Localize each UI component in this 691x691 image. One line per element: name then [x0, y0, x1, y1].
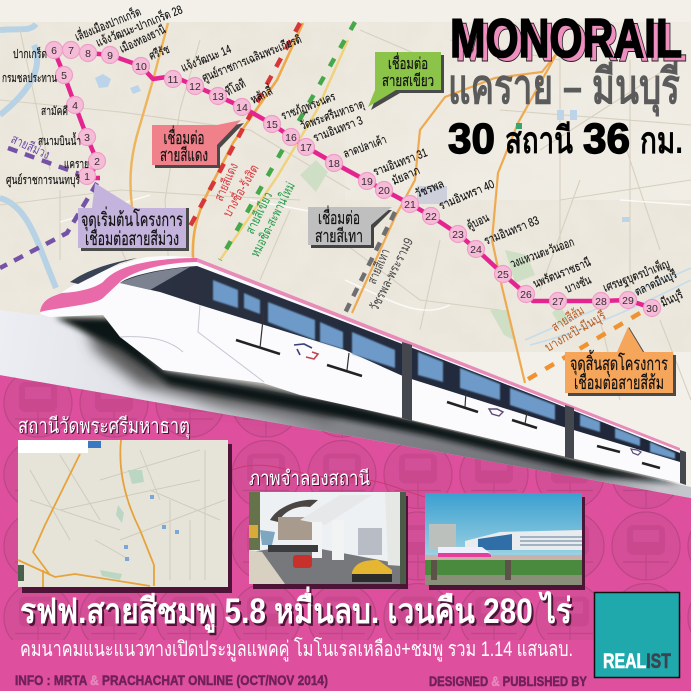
callout: red line [152, 120, 244, 168]
callout: gray line: เชื่อมต่อ [318, 205, 360, 228]
station markers 1-30: 2 [94, 156, 100, 168]
station name labels: รามอินทรา 31 [371, 145, 430, 179]
station name labels [2, 1, 686, 311]
station name labels: มัยลาภ [390, 163, 422, 188]
station name labels: เศรษฐบุตรบำเพ็ญ [601, 256, 672, 296]
summary: stations and distance: สถานี [505, 120, 573, 161]
callout: purple line start: จุดเริ่มต้นโครงการ [81, 206, 183, 232]
station markers 1-30: 8 [85, 48, 91, 60]
pink route line [54, 50, 652, 308]
station name labels: บางชัน [563, 273, 593, 296]
photo: station building render [425, 493, 585, 590]
source credit: INFO : MRTA & PRACHACHAT ONLINE (OCT/NOV 2014) [15, 672, 328, 688]
monorail train [0, 256, 691, 498]
station markers 1-30: 24 [470, 244, 482, 256]
car joints [402, 342, 686, 485]
station name labels: ศูนย์ราชการนนทบุรี [6, 173, 80, 188]
station markers 1-30: 20 [378, 185, 390, 197]
panel: station map [18, 440, 232, 593]
station markers 1-30: 18 [328, 158, 340, 170]
door seam lines [120, 305, 264, 382]
station markers 1-30: 13 [212, 91, 224, 103]
station name labels: ทีโอที [223, 76, 248, 99]
station markers 1-30: 16 [285, 132, 297, 144]
summary: stations and distance: 30 [448, 115, 495, 163]
callout: gray line [308, 205, 392, 248]
dashed line: orange [525, 313, 640, 381]
station markers 1-30: 1 [84, 171, 90, 183]
door marks [236, 340, 660, 468]
window blue panes [213, 280, 675, 459]
windows [120, 266, 680, 462]
line name labels: สายสีแดง [211, 161, 241, 203]
line name labels: วัชรพล-พระราม9 [366, 235, 416, 313]
station markers 1-30: 19 [361, 176, 373, 188]
summary: stations and distance [448, 115, 683, 163]
callout: green line [368, 52, 444, 110]
station name labels: ศูนย์ราชการเฉลิมพระเกียรติ [200, 32, 304, 86]
station name labels: นพรัตนราชธานี [531, 255, 593, 291]
heading: station map: สถานีวัดพระศรีมหาธาตุ [18, 415, 190, 439]
station markers 1-30: 28 [595, 296, 607, 308]
summary: stations and distance: 36 [583, 115, 630, 163]
heading: station render: ภาพจำลองสถานี [250, 469, 371, 491]
station markers 1-30: 5 [61, 70, 67, 82]
station markers 1-30: 3 [84, 132, 90, 144]
station markers 1-30: 26 [520, 289, 532, 301]
station name labels: แคราย [64, 157, 89, 171]
station name labels: คู้บอน [464, 210, 492, 234]
station markers 1-30: 11 [168, 74, 179, 86]
pink nose [40, 258, 200, 312]
callout: purple line start [78, 183, 189, 251]
station name labels: ศรีรัช [147, 42, 172, 63]
station markers 1-30: 14 [236, 102, 248, 114]
station name labels: ปากเกร็ด [13, 46, 47, 61]
callout: red line: สายสีแดง [160, 145, 208, 165]
station name labels: มีนบุรี [658, 287, 686, 311]
station markers 1-30: 10 [135, 61, 147, 73]
station name labels: วงแหวนตะวันออก [508, 235, 576, 271]
dashed line: gray [345, 212, 395, 313]
station name labels: กรมชลประทาน [2, 71, 57, 85]
dashed line: red [188, 23, 300, 230]
station name labels: ราชภัฏพระนคร [279, 89, 338, 123]
line name labels: บางซื่อ-รังสิต [219, 161, 262, 220]
pink lower panel with icon pattern [0, 375, 691, 691]
line name labels: สายสีเทา [364, 246, 393, 286]
station markers 1-30: 12 [189, 81, 201, 93]
dashed line: green [220, 22, 355, 260]
callout: orange line end [565, 327, 676, 396]
line name labels: บางกะปิ-มีนบุรี [542, 308, 609, 355]
station markers 1-30: 15 [266, 119, 278, 131]
station name labels: เมืองทองธานี [117, 22, 168, 56]
publisher credit: DESIGNED & PUBLISHED BY [429, 673, 588, 689]
dashed line: purple [0, 148, 97, 268]
station name labels: รามอินทรา 83 [482, 213, 541, 248]
station name labels: วัดพระศรีมหาธาตุ [298, 97, 366, 134]
station markers 1-30: 29 [622, 295, 634, 307]
main headline [20, 586, 574, 636]
line name labels: หมอชิต-สะพานใหม่ [247, 179, 298, 259]
station markers 1-30: 21 [404, 199, 416, 211]
station markers 1-30: 4 [72, 100, 78, 112]
station name labels: ตลาดมีนบุรี [632, 267, 680, 300]
callout: gray line: สายสีเทา [315, 226, 363, 246]
station markers 1-30: 17 [300, 142, 312, 154]
station name labels: แจ้งวัฒนะ 14 [179, 42, 233, 75]
station name labels: วัชรพล [413, 177, 446, 201]
station name labels: หลักสี่ [247, 82, 275, 107]
pink roof stripe [197, 258, 680, 451]
logo: REALIST: REALIST [603, 650, 671, 673]
rail logo [294, 344, 318, 359]
main headline: รฟฟ.สายสีชมพู 5.8 หมื่นลบ. เวนคืน 280 ไร่ [22, 588, 574, 636]
station name labels: รามอินทรา 40 [437, 177, 497, 213]
callout: green line: สายสเขียว [382, 72, 434, 90]
line name labels: สายสีเขียว [242, 189, 275, 236]
line name labels: สายสีม่วง [9, 131, 52, 162]
station name labels: ลาดปลาเค้า [341, 132, 388, 161]
station markers 1-30 [46, 42, 660, 316]
heading: station map: สถานีวัดพระศรีมหาธาตุ [19, 416, 191, 440]
station markers 1-30: 25 [497, 269, 509, 281]
station markers 1-30: 7 [68, 45, 74, 57]
logo: REALIST [594, 592, 680, 678]
station name labels: สนามบินน้ำ [38, 132, 81, 148]
station markers 1-30: 30 [646, 303, 658, 315]
guideway [0, 310, 691, 498]
windshield highlight [120, 267, 190, 290]
main headline: รฟฟ.สายสีชมพู 5.8 หมื่นลบ. เวนคืน 280 ไร่ [20, 586, 572, 633]
callout: purple line start: เชื่อมต่อสายสีม่วง [85, 225, 179, 250]
photo: street station render [249, 492, 408, 589]
callout: red line: เชื่อมต่อ [164, 125, 204, 148]
line name labels [9, 131, 609, 355]
station markers 1-30: 9 [107, 50, 113, 62]
station name labels: สามัคคี [41, 104, 68, 118]
station markers 1-30: 22 [425, 211, 437, 223]
heading: station render: ภาพจำลองสถานี [249, 468, 370, 490]
station markers 1-30: 6 [51, 45, 57, 57]
station markers 1-30: 27 [552, 296, 564, 308]
windshield top [70, 258, 137, 284]
callout: green line: เชื่อมต่อ [388, 52, 428, 73]
station markers 1-30: 23 [452, 229, 464, 241]
body [40, 256, 680, 483]
line name labels: สายสีส้ม [548, 302, 587, 335]
station name labels: รามอินทรา 3 [311, 113, 365, 145]
